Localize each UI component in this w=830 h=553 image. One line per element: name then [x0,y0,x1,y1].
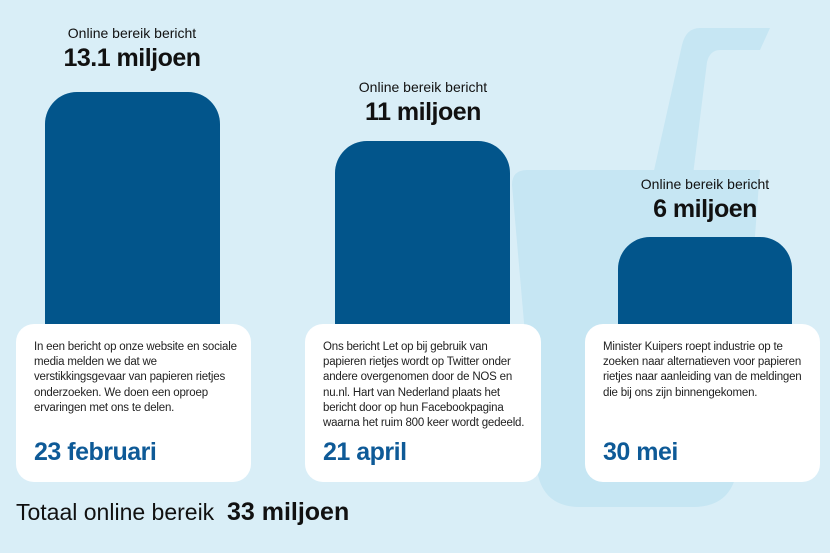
bar 3 [618,237,792,326]
label 1 [63,25,201,72]
card 3 [585,324,820,482]
card 3: 30 mei [603,438,678,466]
total: Totaal online bereik 33 miljoen [16,498,349,526]
label 1: 13.1 miljoen [63,44,201,72]
card 1 [16,324,251,482]
label 3: 6 miljoen [653,195,757,223]
label 3: Online bereik bericht [641,176,769,192]
label 1: Online bereik bericht [68,25,196,41]
card 2: 21 april [323,438,407,466]
label 2: Online bereik bericht [359,79,487,95]
bar 2 [335,141,510,326]
card 1: In een bericht op onze website en sociale media melden we dat we verstikkingsgevaar van papieren rietjes onderzoeken. We doen een oproep ervaringen met ons te delen. [34,341,237,414]
card 2: Ons bericht Let op bij gebruik van papieren rietjes wordt op Twitter onder andere overgenomen door de NOS en nu.nl. Hart van Nederland plaats het bericht door op hun Facebookpagina waarna het ruim 800 keer wordt gedeeld. [323,341,524,429]
label 3 [641,176,770,223]
card 2 [305,324,541,482]
bar 1 [45,92,220,326]
card 1: 23 februari [34,438,156,466]
label 2: 11 miljoen [365,98,481,126]
card 3: Minister Kuipers roept industrie op te zoeken naar alternatieven voor papieren rietjes naar aanleiding van de meldingen die bij ons zijn binnengekomen. [603,341,802,399]
label 2 [359,79,488,126]
